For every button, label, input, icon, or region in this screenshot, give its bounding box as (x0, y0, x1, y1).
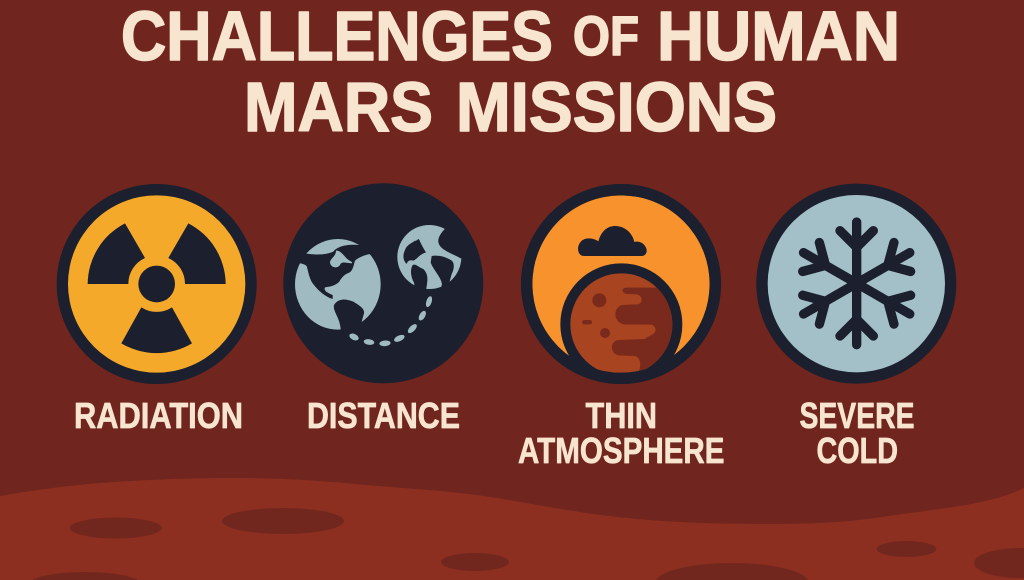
title: MARS (244, 68, 433, 146)
large globe (293, 239, 381, 337)
icon: thin atmosphere planet (521, 184, 721, 385)
label: thin atmosphere (518, 395, 724, 471)
title: MISSIONS (456, 68, 777, 146)
small globe (397, 223, 470, 292)
icon: snowflake for severe cold (756, 184, 956, 384)
label: distance: DISTANCE (307, 395, 460, 436)
label: radiation: RADIATION (74, 395, 243, 436)
icon: distance between Earth and Mars (283, 183, 483, 383)
label: severe cold: SEVERE (800, 395, 914, 436)
dashed route (348, 295, 433, 347)
label: severe cold: COLD (816, 430, 898, 471)
title (121, 0, 900, 146)
planet (560, 263, 682, 373)
title: OF (573, 4, 639, 67)
Mars ground with craters (0, 478, 1024, 580)
label: severe cold (800, 395, 914, 471)
label: thin atmosphere: ATMOSPHERE (518, 430, 724, 471)
label: thin atmosphere: THIN (586, 395, 657, 436)
cloud (578, 226, 647, 256)
icon: radiation trefoil (57, 184, 257, 384)
